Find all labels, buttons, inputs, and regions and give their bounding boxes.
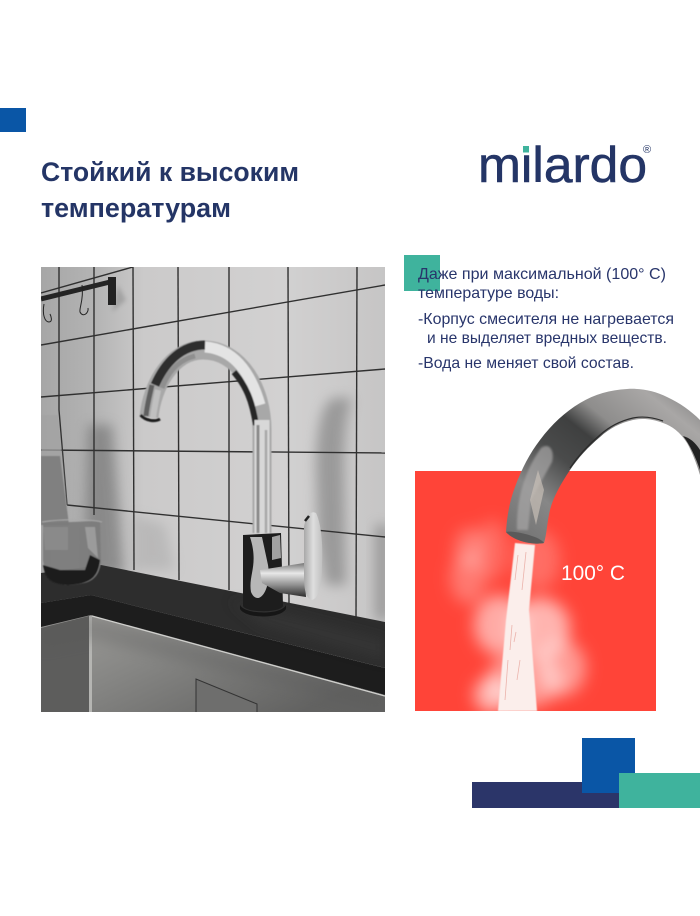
faucet base and handle: [240, 512, 322, 616]
faucet: [140, 345, 266, 533]
title: [41, 157, 299, 223]
decorative blue square top left: [0, 108, 26, 132]
sink: [41, 615, 385, 712]
temperature label: 100° C: [561, 562, 625, 585]
red square: [415, 471, 656, 711]
wall tiles: [41, 267, 390, 627]
description text: и не выделяет вредных веществ.: [427, 330, 667, 347]
description text: [418, 266, 674, 372]
large spout: [506, 389, 700, 544]
steam: [450, 520, 586, 713]
teal accent square: [404, 255, 440, 291]
vase and glass: [41, 415, 102, 585]
description text: -Корпус смесителя не нагревается: [418, 311, 674, 328]
description text: Даже при максимальной (100° С): [418, 266, 666, 283]
photo: kitchen faucet: [41, 267, 390, 712]
hanging rail with hooks: [41, 277, 126, 322]
decorative blocks bottom right: [472, 738, 700, 808]
title: Стойкий к высоким: [41, 157, 299, 187]
panel: hot water image: [415, 389, 700, 713]
logo: milardo: ®: [643, 144, 651, 156]
description text: температуре воды:: [418, 285, 559, 302]
water stream: [498, 543, 537, 711]
countertop: [41, 565, 385, 695]
title: температурам: [41, 193, 231, 223]
logo: milardo: milardo: [478, 137, 647, 193]
description text: -Вода не меняет свой состав.: [418, 355, 634, 372]
